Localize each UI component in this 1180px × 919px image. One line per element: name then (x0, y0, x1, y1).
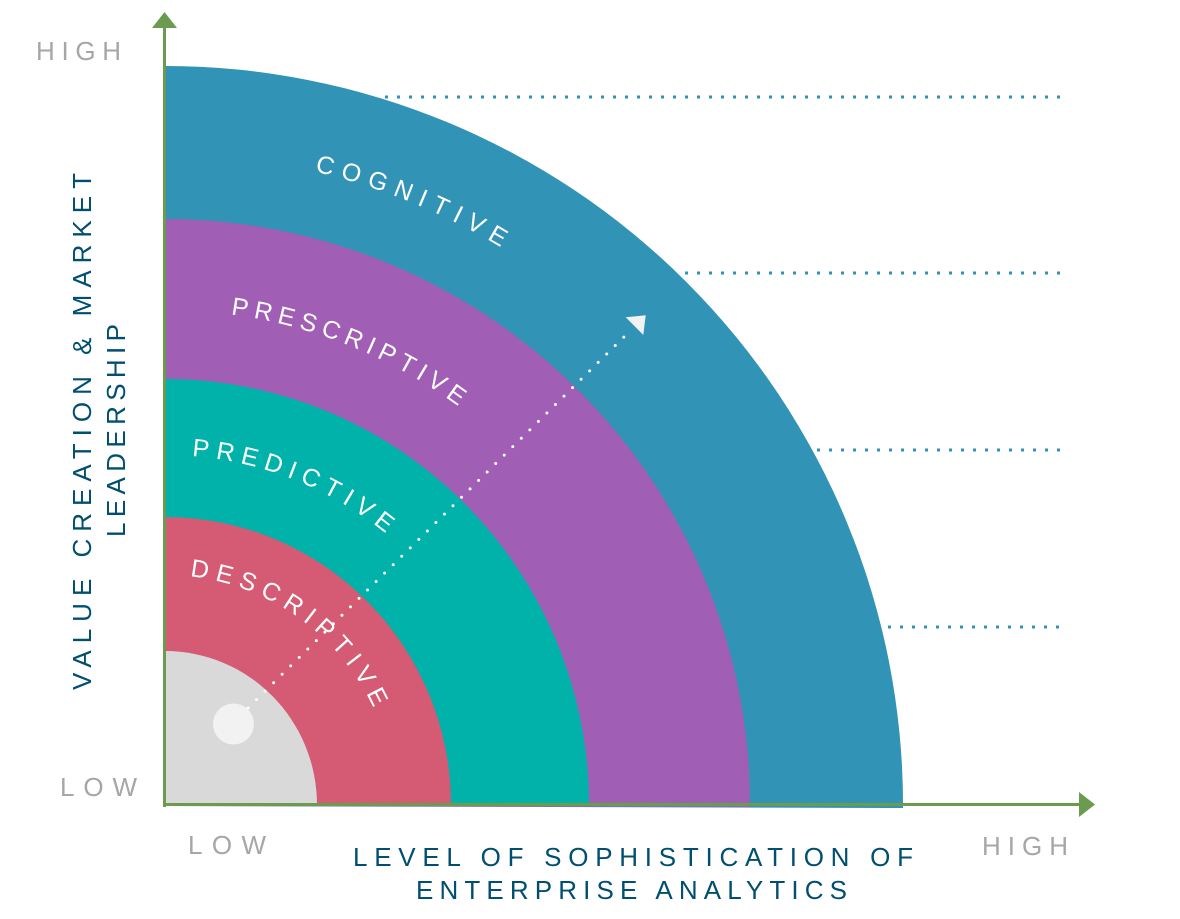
y axis arrow (152, 12, 177, 807)
dotted progress arrow (248, 315, 646, 708)
label: predictive: PREDICTIVE (194, 439, 396, 533)
x axis title: ENTERPRISE ANALYTICS (416, 875, 847, 905)
core: grey starting quadrant (165, 651, 317, 806)
y axis title: VALUE CREATION & MARKET (67, 173, 97, 690)
y axis low label: LOW (60, 772, 137, 802)
x axis arrow (163, 792, 1095, 817)
ring: descriptive (165, 517, 451, 806)
y axis title: LEADERSHIP (101, 324, 131, 537)
y axis title (67, 173, 131, 690)
label: descriptive: DESCRIPTIVE (192, 559, 388, 707)
start point circle (213, 704, 254, 744)
label: prescriptive: PRESCRIPTIVE (232, 298, 468, 406)
label: cognitive: COGNITIVE (318, 156, 508, 247)
ring: prescriptive (165, 219, 750, 807)
ring: predictive (165, 379, 589, 806)
dotted guide lines (385, 97, 1060, 627)
x axis title (353, 842, 913, 905)
x axis high label: HIGH (982, 831, 1068, 861)
ring: cognitive (165, 66, 903, 808)
x axis low label: LOW (188, 830, 266, 860)
x axis title: LEVEL OF SOPHISTICATION OF (353, 842, 913, 872)
y axis high label: HIGH (36, 36, 121, 66)
